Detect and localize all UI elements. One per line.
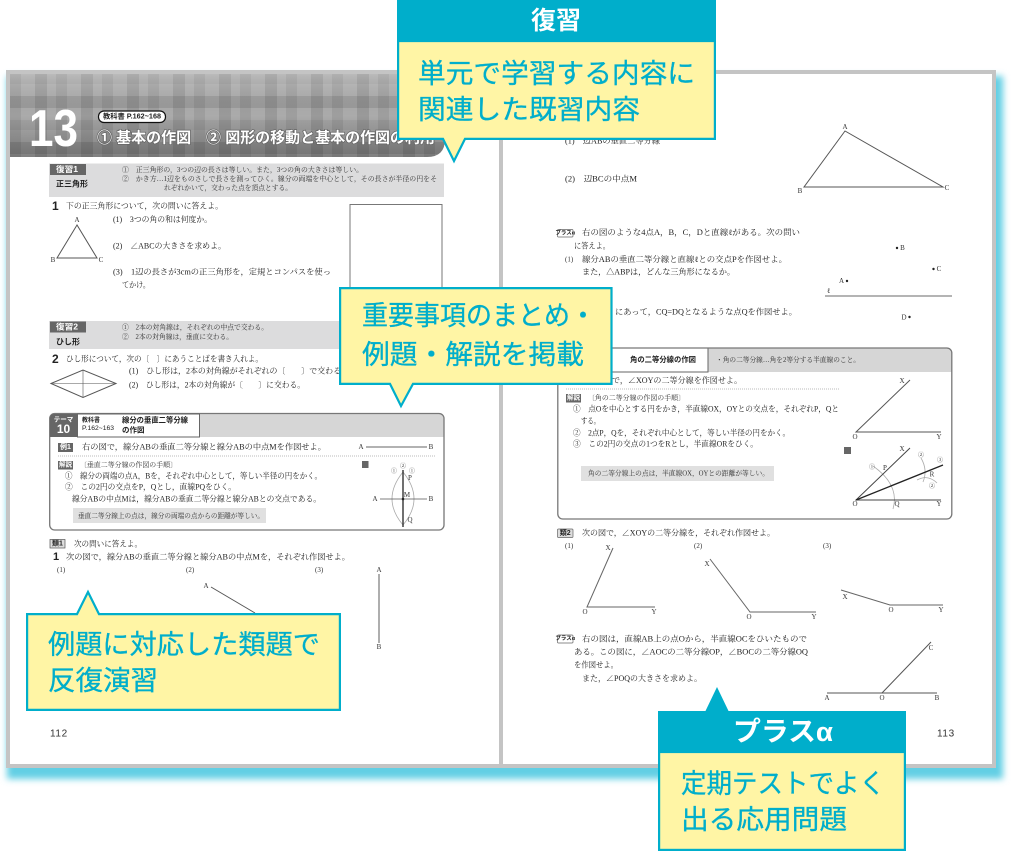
- construction figure: ①: [391, 467, 397, 475]
- plus alpha question 1: に答えよ。: [574, 240, 610, 250]
- solution: ③ この2円の交点の1つをRとし，半直線ORをひく。: [573, 438, 758, 450]
- plus alpha question 1: 線分ABの垂直二等分線と直線ℓとの交点Pを作図せよ。: [582, 254, 787, 264]
- exercise 2: 類2: [560, 528, 571, 537]
- solution: 〔垂直二等分線の作図の手順〕: [80, 460, 177, 469]
- solution: [58, 460, 322, 523]
- example 1: [58, 442, 434, 452]
- angle bisector construction figure: ③: [937, 456, 943, 464]
- callout text: 出る応用問題: [681, 805, 847, 835]
- theme 10 box: [50, 414, 444, 530]
- example 1: 例1: [60, 442, 71, 451]
- question 1: [51, 199, 442, 314]
- callout: 重要事項: [340, 288, 612, 406]
- exercise continuation: [565, 136, 660, 184]
- solution: ② この2円の交点をP，Qとし，直線PQをひく。: [65, 482, 236, 492]
- plus alpha question 2: を作図せよ。: [574, 660, 618, 670]
- plus alpha question 2: ある。この図に，∠AOCの二等分線OP，∠BOCの二等分線OQ: [574, 646, 808, 658]
- callout: 復習: [397, 0, 716, 161]
- triangle ABC figure: [798, 123, 950, 195]
- triangle figure: A: [74, 216, 80, 224]
- construction figure: P: [408, 474, 412, 482]
- points and line figure: A: [839, 277, 844, 285]
- exercise 1: B: [377, 643, 382, 651]
- callout text: 単元で学習する内容に: [418, 59, 695, 89]
- solution: 解説: [59, 460, 72, 468]
- review box 1: ② かき方…1辺をものさしで長さを測ってひく。線分の両端を中心として，その長さが半径の円をそ: [122, 174, 437, 184]
- callout heading: プラスα: [733, 717, 833, 747]
- question 2: [51, 352, 349, 398]
- solution: 解説: [567, 392, 580, 402]
- construction figure: [362, 461, 434, 527]
- theme number: 10: [57, 422, 70, 436]
- angle bisector construction figure: P: [883, 464, 887, 472]
- review box 1: ① 正三角形の，3つの辺の長さは等しい。また，3つの角の大きさは等しい。: [122, 165, 363, 175]
- construction figure: Q: [407, 516, 413, 524]
- callout pointer: [705, 687, 729, 712]
- definition: ・角の二等分線…角を2等分する半直線のこと。: [716, 355, 860, 364]
- line AB with ray OC figure: C: [929, 644, 934, 652]
- page number 112: 112: [50, 728, 68, 740]
- triangle ABC figure: B: [798, 187, 803, 195]
- plus alpha question 1: 右の図のような4点A，B，C，Dと直線ℓがある。次の問い: [582, 227, 800, 238]
- points and line figure: C: [937, 265, 942, 273]
- plus alpha question 2: プラスα: [555, 635, 576, 642]
- angle 1: Y: [651, 608, 657, 616]
- plus alpha question 2: また，∠POQの大きさを求めよ。: [582, 673, 702, 684]
- callout body: [340, 288, 612, 406]
- angle 3: O: [888, 606, 894, 614]
- textbook page badge: [98, 111, 166, 122]
- exercise 2: (1): [565, 542, 574, 550]
- angle 2: Y: [811, 613, 817, 621]
- exercise continuation: (1) 辺ABの垂直二等分線: [565, 136, 660, 146]
- triangle figure: B: [51, 256, 56, 264]
- question 2: 2: [52, 352, 59, 366]
- panel: right page: [555, 123, 955, 740]
- theme number: [50, 414, 77, 437]
- exercise 1: (1): [57, 566, 66, 574]
- callout header: [658, 711, 906, 753]
- callout: 類題: [27, 592, 340, 710]
- angle bisector construction figure: X: [899, 445, 905, 453]
- solution: 〔角の二等分線の作図の手順〕: [588, 393, 685, 402]
- theme heading: の作図: [122, 424, 144, 434]
- callout text: 重要事項のまとめ・: [362, 301, 596, 331]
- angle 1: X: [605, 544, 611, 552]
- solution: [566, 392, 839, 481]
- header band: [10, 74, 445, 158]
- exercise 1: [50, 538, 382, 651]
- panel: left page: [10, 74, 445, 740]
- callout body: [27, 592, 340, 710]
- angle 3: [841, 590, 944, 614]
- angle bisector construction figure: Q: [894, 500, 900, 508]
- review box 2: [49, 321, 444, 349]
- angle bisector construction figure: ②: [929, 482, 935, 490]
- question 1: (1) 3つの角の和は何度か。: [113, 214, 212, 224]
- points and line figure: [825, 244, 952, 322]
- review box 2: ひし形: [56, 336, 80, 346]
- theme heading: P.162~163: [82, 426, 115, 432]
- example 1: A: [358, 443, 364, 451]
- line AB with ray OC figure: A: [824, 694, 830, 702]
- exercise continuation: (2) 辺BCの中点M: [565, 174, 637, 184]
- construction figure: A: [372, 495, 378, 503]
- question 1: 1: [52, 199, 59, 213]
- triangle ABC figure: C: [945, 184, 950, 192]
- theme number: テーマ: [54, 416, 74, 424]
- theme heading: [78, 414, 200, 437]
- question 1: 下の正三角形について，次の問いに答えよ。: [66, 200, 223, 212]
- example: で，∠XOYの二等分線を作図せよ。: [612, 375, 742, 386]
- unit title: ① 基本の作図 ② 図形の移動と基本の作図の利用: [97, 128, 435, 146]
- construction figure: ①: [409, 467, 415, 475]
- angle 3: Y: [938, 606, 944, 614]
- question 1: てかけ。: [122, 280, 150, 290]
- theme heading: 教科書: [82, 416, 100, 424]
- callout header: [397, 0, 716, 41]
- callout heading: 復習: [531, 7, 581, 35]
- solution: 線分ABの中点Mは，線分ABの垂直二等分線と線分ABとの交点である。: [72, 494, 321, 504]
- line AB with ray OC figure: [824, 642, 940, 702]
- exercise 1: 類1: [52, 538, 63, 548]
- callout text: [48, 630, 320, 696]
- points and line figure: D: [901, 314, 907, 322]
- exercise 1: 次の図で，線分ABの垂直二等分線と線分ABの中点Mを，それぞれ作図せよ。: [66, 552, 350, 562]
- angle 3: X: [842, 593, 848, 601]
- page number 113: 113: [937, 728, 955, 740]
- angle 2: [704, 559, 817, 621]
- textbook page badge: 教科書 P.162~168: [103, 112, 161, 120]
- points and line figure: B: [900, 244, 905, 252]
- exercise 1: A: [203, 582, 209, 590]
- solution: ① 線分の両端の点A，Bを，それぞれ中心として，等しい半径の円をかく。: [65, 470, 322, 482]
- angle bisector construction figure: ②: [918, 451, 924, 459]
- question 1: (2) ∠ABCの大きさを求めよ。: [113, 240, 226, 250]
- line AB with ray OC figure: B: [935, 694, 940, 702]
- answer box: [350, 204, 442, 314]
- callout text: 例題・解説を掲載: [362, 340, 584, 370]
- unit number: 13: [29, 100, 78, 158]
- callout text: 反復演習: [48, 666, 158, 696]
- review box 1: 正三角形: [56, 178, 88, 188]
- example 1: B: [429, 443, 434, 451]
- question 1: (3) 1辺の長さが3cmの正三角形を，定規とコンパスを使っ: [113, 266, 331, 278]
- exercise 1: (2): [186, 566, 195, 574]
- solution: する。: [581, 416, 600, 426]
- callout: プラスα: [658, 687, 906, 850]
- callout text: 関連した既習内容: [418, 95, 640, 125]
- exercise 2: [558, 528, 944, 621]
- triangle figure: [51, 216, 104, 264]
- angle figure: X: [899, 377, 905, 385]
- plus alpha question 1: プラスα: [555, 229, 576, 236]
- review box 1: [49, 164, 444, 197]
- callout body: [659, 752, 905, 850]
- theme heading: 角の二等分線の作図: [630, 354, 696, 364]
- plus alpha question 1: (1): [565, 256, 574, 264]
- callout text: 定期テストでよく: [681, 769, 885, 799]
- angle figure: O: [852, 433, 858, 441]
- line AB with ray OC figure: O: [879, 694, 885, 702]
- solution: 垂直二等分線上の点は，線分の両端の点からの距離が等しい。: [78, 511, 264, 521]
- review box 2: ② 2本の対角線は，垂直に交わる。: [122, 332, 233, 342]
- exercise 1: (3): [315, 566, 324, 574]
- angle bisector construction figure: [844, 445, 943, 509]
- angle 1: O: [582, 608, 588, 616]
- callout text: [418, 59, 695, 125]
- angle 2: O: [746, 613, 752, 621]
- exercise 2: (2): [694, 542, 703, 550]
- angle bisector construction figure: Y: [936, 500, 942, 508]
- angle bisector construction figure: O: [852, 500, 858, 508]
- solution: ① 点Oを中心とする円をかき，半直線OX，OYとの交点を，それぞれP，Qと: [573, 404, 839, 414]
- callout text: 例題に対応した類題で: [48, 630, 320, 660]
- review box 2: 復習2: [56, 322, 79, 332]
- question 2: ひし形について，次の〔 〕にあうことばを書き入れよ。: [66, 354, 263, 364]
- review box 1: れぞれかいて，交わった点を頂点とする。: [164, 183, 292, 193]
- angle figure: Y: [936, 433, 942, 441]
- exercise 1: A: [376, 566, 382, 574]
- angle 2: X: [704, 560, 710, 568]
- plus alpha question 1: また，△ABPは，どんな三角形になるか。: [582, 266, 735, 278]
- plus alpha question 1: にあって，CQ=DQとなるような点Qを作図せよ。: [615, 306, 797, 318]
- solution: ② 2点P，Qを，それぞれ中心として，等しい半径の円をかく。: [573, 428, 790, 438]
- construction figure: B: [429, 495, 434, 503]
- exercise 2: 次の図で，∠XOYの二等分線を，それぞれ作図せよ。: [582, 528, 775, 538]
- construction figure: M: [404, 491, 411, 499]
- rhombus figure: [51, 370, 116, 398]
- question 2: (2) ひし形は，2本の対角線が〔 〕に交わる。: [129, 380, 305, 390]
- theme heading: 線分の垂直二等分線: [122, 414, 188, 424]
- callout text: [362, 301, 596, 370]
- angle figure: [852, 377, 942, 441]
- points and line figure: ℓ: [827, 287, 830, 295]
- plus alpha question 1: [555, 227, 800, 318]
- callout body: [398, 41, 715, 161]
- angle bisector construction figure: R: [930, 470, 935, 478]
- plus alpha question 2: [555, 634, 808, 684]
- angle 1: [582, 544, 657, 616]
- question 2: (1) ひし形は，2本の対角線がそれぞれの〔 〕で交わる。: [129, 366, 349, 376]
- exercise 1: 次の問いに答えよ。: [74, 538, 142, 548]
- exercise 1: 1: [53, 551, 59, 563]
- plus alpha question 2: 右の図は，直線AB上の点Oから，半直線OCをひいたもので: [582, 634, 807, 644]
- triangle figure: C: [99, 256, 104, 264]
- review box 1: 復習1: [56, 164, 79, 174]
- solution: 角の二等分線上の点は，半直線OX，OYとの距離が等しい。: [588, 468, 769, 478]
- construction figure: ②: [400, 462, 406, 470]
- review box 2: ① 2本の対角線は，それぞれの中点で交わる。: [122, 322, 268, 332]
- example 1: 右の図で，線分ABの垂直二等分線と線分ABの中点Mを作図せよ。: [82, 442, 326, 452]
- callout text: [681, 769, 885, 835]
- angle bisector construction figure: ①: [869, 463, 875, 471]
- theme box: angle bisector: [558, 348, 952, 519]
- triangle ABC figure: A: [842, 123, 848, 131]
- exercise 2: (3): [823, 542, 832, 550]
